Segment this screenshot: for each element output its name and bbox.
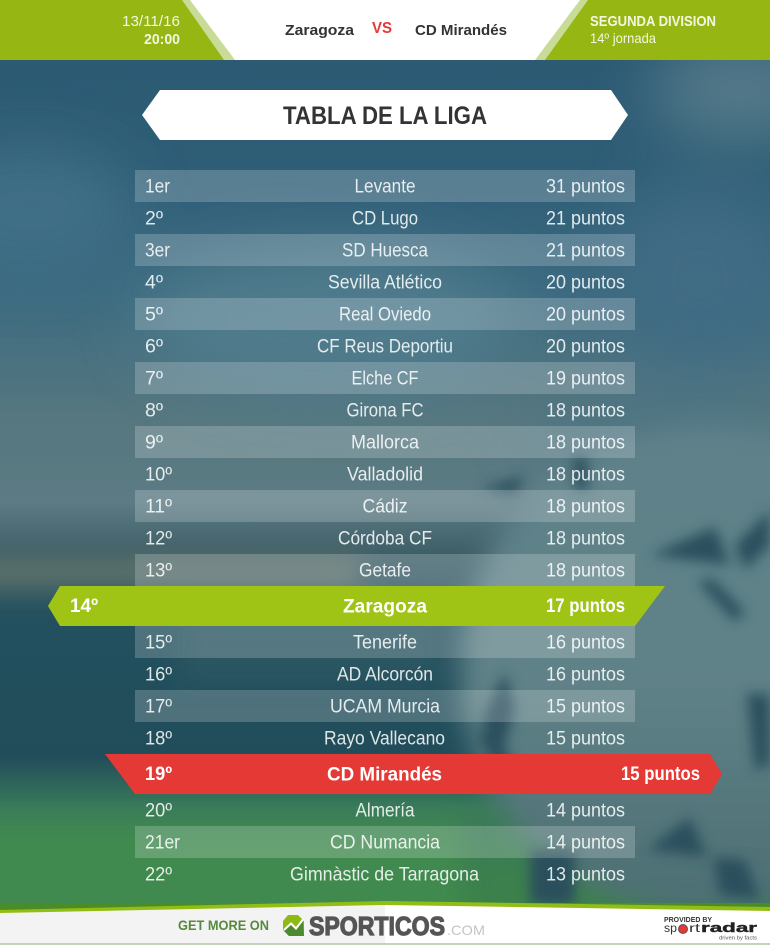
shaded row stripes [135, 170, 635, 858]
row: Córdoba CF: 12º [145, 528, 172, 550]
row: Almería: Almería [356, 800, 415, 822]
row: Elche CF [145, 368, 625, 390]
get more on label: GET MORE ON [178, 917, 269, 933]
row: AD Alcorcón: 16 puntos [546, 664, 625, 686]
footer green band [0, 903, 770, 917]
row: Elche CF: 19 puntos [546, 368, 625, 390]
sportradar credit: driven by facts [719, 936, 758, 942]
row: Gimnàstic de Tarragona: 22º [145, 864, 172, 886]
highlighted row: Zaragoza: 17 puntos [546, 596, 625, 617]
row: AD Alcorcón: AD Alcorcón [337, 664, 433, 686]
row: Tenerife: 15º [145, 632, 172, 654]
sporticos wordmark: SPORTICOS [309, 911, 445, 941]
row: Levante: 1er [145, 176, 171, 198]
header bar [0, 0, 770, 60]
row: Girona FC: 18 puntos [546, 400, 625, 422]
highlighted row: CD Mirandés: 19º [145, 764, 172, 785]
header white centre [190, 0, 580, 60]
row: AD Alcorcón [145, 664, 625, 686]
icon: sporticos logo mark [283, 915, 304, 936]
title banner [142, 90, 628, 140]
row: Córdoba CF: Córdoba CF [338, 528, 432, 550]
competition: SEGUNDA DIVISION [590, 13, 716, 30]
header green background [0, 0, 770, 60]
row: Córdoba CF [145, 528, 625, 550]
row: Rayo Vallecano: 18º [145, 728, 172, 750]
row: Real Oviedo: 5º [145, 304, 163, 326]
header light stripes [182, 0, 588, 60]
row: UCAM Murcia [145, 696, 625, 718]
row: Gimnàstic de Tarragona [145, 864, 625, 886]
sportradar credit: radar [701, 921, 757, 935]
row: Levante: 31 puntos [546, 176, 625, 198]
row: CD Lugo: CD Lugo [352, 208, 418, 230]
row: Rayo Vallecano: Rayo Vallecano [324, 728, 445, 750]
sportradar credit: sp [664, 921, 677, 935]
highlighted row: CD Mirandés: CD Mirandés [327, 764, 442, 786]
footer white panels [0, 905, 385, 945]
row: Almería: 20º [145, 800, 172, 822]
row: Girona FC: 8º [145, 400, 163, 422]
row: SD Huesca: 21 puntos [546, 240, 625, 262]
row: Gimnàstic de Tarragona: 13 puntos [546, 864, 625, 886]
row: Girona FC: Girona FC [346, 400, 424, 422]
row: Mallorca: 18 puntos [546, 432, 625, 454]
row: Cádiz: Cádiz [362, 496, 408, 518]
highlighted row: CD Mirandés [105, 754, 722, 794]
row: AD Alcorcón: 16º [145, 664, 172, 686]
row: Valladolid: 10º [145, 464, 172, 486]
row: Valladolid [145, 464, 625, 486]
competition [590, 13, 716, 46]
row: CF Reus Deportiu [145, 336, 625, 358]
match date [122, 13, 180, 48]
row: Sevilla Atlético: 4º [145, 272, 163, 294]
highlighted row: Zaragoza [48, 586, 665, 626]
row: UCAM Murcia: 15 puntos [546, 696, 625, 718]
match teams: CD Mirandés [415, 22, 507, 39]
row: CF Reus Deportiu: 6º [145, 336, 163, 358]
row: UCAM Murcia: 17º [145, 696, 172, 718]
row: Valladolid: Valladolid [347, 464, 423, 486]
sportradar credit [664, 915, 758, 942]
row: CD Numancia [145, 832, 625, 854]
row: Mallorca [145, 432, 625, 454]
row: CD Numancia: CD Numancia [330, 832, 440, 854]
row: CD Numancia: 21er [145, 832, 181, 854]
row: Levante [145, 176, 625, 198]
row: Getafe [145, 560, 625, 582]
footer [0, 901, 770, 945]
row: Mallorca: Mallorca [351, 432, 419, 454]
sportradar credit: rt [689, 921, 701, 935]
row: Levante: Levante [354, 176, 416, 198]
competition: 14º jornada [590, 30, 656, 46]
row: Tenerife: Tenerife [353, 632, 417, 654]
sportradar credit: PROVIDED BY [664, 915, 712, 924]
row: Gimnàstic de Tarragona: Gimnàstic de Tarragona [290, 864, 479, 886]
row: Sevilla Atlético: 20 puntos [546, 272, 625, 294]
row: Tenerife: 16 puntos [546, 632, 625, 654]
row: Rayo Vallecano: 15 puntos [546, 728, 625, 750]
row: SD Huesca: 3er [145, 240, 171, 262]
match date: 13/11/16 [122, 13, 180, 30]
match teams: Zaragoza [285, 22, 355, 39]
row: CD Lugo: 2º [145, 208, 163, 230]
.com label: .COM [447, 922, 485, 938]
row: Real Oviedo: 20 puntos [546, 304, 625, 326]
row: Getafe: 18 puntos [546, 560, 625, 582]
row: Sevilla Atlético: Sevilla Atlético [328, 272, 442, 294]
highlighted row: CD Mirandés: 15 puntos [621, 764, 700, 785]
row: Almería: 14 puntos [546, 800, 625, 822]
row: Getafe: 13º [145, 560, 172, 582]
match date: 20:00 [144, 31, 180, 48]
highlighted row: Zaragoza: Zaragoza [343, 596, 427, 618]
row: Real Oviedo [145, 304, 625, 326]
row: CF Reus Deportiu: CF Reus Deportiu [317, 336, 453, 358]
row: CF Reus Deportiu: 20 puntos [546, 336, 625, 358]
row: Tenerife [145, 632, 625, 654]
row: Sevilla Atlético [145, 272, 625, 294]
row: CD Numancia: 14 puntos [546, 832, 625, 854]
row: Rayo Vallecano [145, 728, 625, 750]
row: Valladolid: 18 puntos [546, 464, 625, 486]
row: Cádiz: 18 puntos [546, 496, 625, 518]
row: Girona FC [145, 400, 625, 422]
row: Elche CF: 7º [145, 368, 163, 390]
row: Córdoba CF: 18 puntos [546, 528, 625, 550]
row: CD Lugo: 21 puntos [546, 208, 625, 230]
row: Elche CF: Elche CF [352, 368, 418, 390]
row: UCAM Murcia: UCAM Murcia [330, 696, 440, 718]
match teams [285, 20, 507, 39]
row: SD Huesca: SD Huesca [342, 240, 428, 262]
row: Almería [145, 800, 625, 822]
row: SD Huesca [145, 240, 625, 262]
highlighted row: Zaragoza: 14º [70, 596, 98, 617]
title banner: TABLA DE LA LIGA [283, 102, 487, 130]
league table [48, 170, 722, 886]
row: Cádiz [145, 496, 625, 518]
row: Mallorca: 9º [145, 432, 163, 454]
row: Getafe: Getafe [359, 560, 411, 582]
row: Cádiz: 11º [145, 496, 172, 518]
row: CD Lugo [145, 208, 625, 230]
match teams: VS [372, 20, 392, 37]
row: Real Oviedo: Real Oviedo [339, 304, 431, 326]
